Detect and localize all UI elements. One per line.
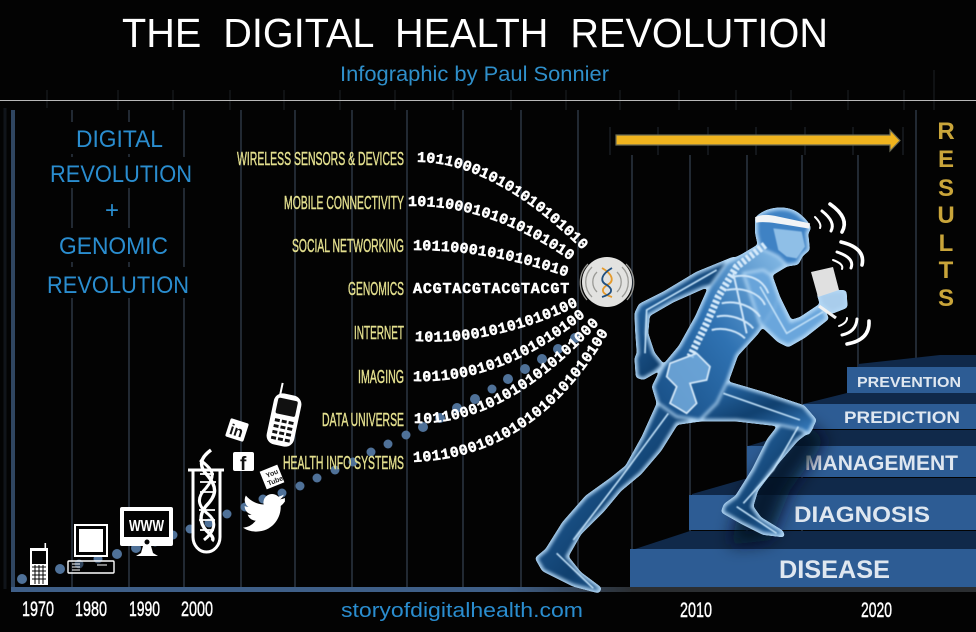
wristband <box>819 306 836 318</box>
headband <box>755 215 810 229</box>
heading: digital revolution plus genomic revolution: REVOLUTION <box>50 161 192 188</box>
dotted growth curve <box>17 333 580 584</box>
icon: early mobile phone <box>30 543 48 585</box>
front thigh <box>690 383 815 433</box>
icon: desktop computer <box>68 525 114 573</box>
technology labels: WIRELESS SENSORS & DEVICES <box>237 149 404 169</box>
binary data streams: 101100010101010101000 <box>414 310 584 382</box>
technology labels: INTERNET <box>354 323 404 343</box>
binary data streams: ACGTACGTACGTACGT <box>412 282 570 294</box>
icon: dna test tube <box>188 450 224 552</box>
results vertical label: E <box>938 146 954 173</box>
results vertical label: T <box>939 257 954 284</box>
year labels: 2010 <box>680 599 712 622</box>
runner shadow on steps <box>730 420 826 545</box>
icon: youtube <box>260 465 285 489</box>
skull and neck bones <box>773 228 805 258</box>
binary data streams: 10110001010101010101000 <box>414 318 598 424</box>
website url: storyofdigitalhealth.com <box>341 600 583 622</box>
icon: twitter bird <box>243 494 285 532</box>
technology labels: GENOMICS <box>348 279 404 299</box>
step: prediction: PREDICTION <box>844 408 960 427</box>
technology labels: IMAGING <box>358 367 404 387</box>
results vertical label: R <box>937 118 955 145</box>
arm bones <box>645 270 823 353</box>
torso <box>653 245 787 420</box>
arrow <box>616 130 900 151</box>
hand <box>818 292 846 312</box>
results vertical label: L <box>939 230 953 257</box>
year labels: 2020 <box>861 599 892 622</box>
results vertical label <box>937 118 955 312</box>
pelvis <box>667 353 710 413</box>
skeleton <box>557 228 823 588</box>
technology labels: SOCIAL NETWORKING <box>292 236 404 256</box>
year labels: 2000 <box>181 598 213 621</box>
body silhouette <box>537 209 846 592</box>
faint timeline grid <box>5 70 934 590</box>
results vertical label: S <box>938 285 954 312</box>
icon: facebook <box>233 452 254 475</box>
wireless signal waves <box>815 204 869 344</box>
results vertical label: S <box>938 175 954 202</box>
staircase of results <box>630 355 976 587</box>
step: diagnosis: DIAGNOSIS <box>794 502 930 527</box>
year labels: 1970 <box>22 598 54 621</box>
device card <box>811 267 839 297</box>
x-ray runner figure <box>537 209 846 592</box>
spine <box>690 245 765 357</box>
rear leg <box>537 403 700 592</box>
heading: digital revolution plus genomic revolution: REVOLUTION <box>47 272 189 299</box>
binary data streams: 10110001010101010101010100 <box>414 329 607 462</box>
title: THE DIGITAL HEALTH REVOLUTION <box>122 10 828 56</box>
heading: digital revolution plus genomic revolution: GENOMIC <box>59 233 168 260</box>
subtitle: Infographic by Paul Sonnier <box>340 63 609 86</box>
timeline axis <box>11 587 976 592</box>
icon: youtube: Tube <box>267 475 284 488</box>
heading: digital revolution plus genomic revolution <box>45 122 218 299</box>
leg bones <box>557 393 800 588</box>
icon: dna signal badge <box>580 257 634 307</box>
rear arm <box>636 258 733 378</box>
icon: linkedin <box>225 418 249 442</box>
front arm <box>743 270 827 346</box>
step: disease: DISEASE <box>779 556 890 584</box>
year labels: 1990 <box>129 598 160 621</box>
header rule <box>0 100 976 101</box>
technology labels: MOBILE CONNECTIVITY <box>284 193 404 213</box>
technology labels <box>237 149 404 473</box>
heading: digital revolution plus genomic revolution: + <box>105 197 119 224</box>
icon: linkedin: in <box>227 421 245 441</box>
step: prevention: PREVENTION <box>857 374 961 391</box>
icon: www monitor: WWW <box>129 518 165 535</box>
step: management: MANAGEMENT <box>805 452 958 475</box>
technology labels: DATA UNIVERSE <box>322 410 404 430</box>
icon: youtube: You <box>265 469 280 480</box>
results vertical label: U <box>937 202 955 229</box>
technology labels: HEALTH INFO SYSTEMS <box>283 453 404 473</box>
ribs <box>712 273 768 338</box>
heading: digital revolution plus genomic revolution: DIGITAL <box>76 126 163 153</box>
icon: www monitor <box>120 507 173 556</box>
binary data streams <box>408 152 607 462</box>
year labels <box>22 598 892 622</box>
year labels: 1980 <box>75 598 107 621</box>
icon: facebook: f <box>240 454 247 475</box>
head <box>757 209 809 265</box>
icon: smartphone <box>265 382 305 448</box>
front shin and foot <box>723 425 812 536</box>
